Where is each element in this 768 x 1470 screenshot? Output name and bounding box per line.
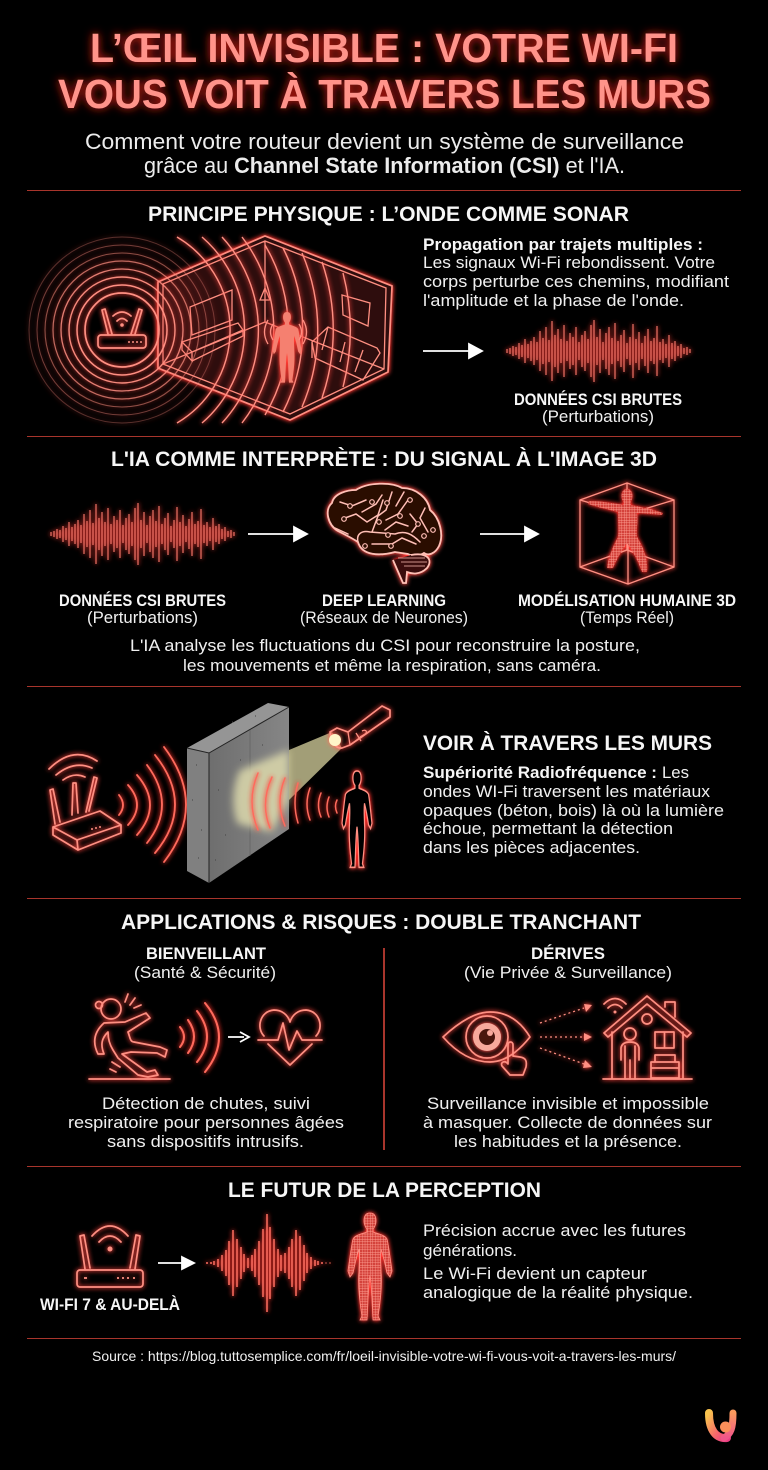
label: raw data: DONNÉES CSI BRUTES	[59, 591, 226, 610]
heading: futur: LE FUTUR DE LA PERCEPTION	[228, 1179, 541, 1202]
arrow	[248, 527, 307, 541]
text: futur: Le Wi-Fi devient un capteur	[423, 1265, 648, 1283]
text: bienveillant: sans dispositifs intrusifs.	[107, 1133, 304, 1151]
label: 3D modelling: (Temps Réel)	[580, 609, 674, 627]
source: Source : https://blog.tuttosemplice.com/fr/loeil-invisible-votre-wi-fi-vous-voit-a-travers-les-murs/	[92, 1348, 676, 1364]
logo	[709, 1413, 733, 1438]
icon: router	[92, 300, 152, 360]
text: IA description: L'IA analyse les fluctuations du CSI pour reconstruire la posture,	[130, 637, 640, 655]
heading: IA: L'IA COMME INTERPRÈTE : DU SIGNAL À L'IMAGE 3D	[111, 448, 657, 471]
text: propagation	[423, 236, 729, 310]
text: dérives	[423, 1095, 713, 1151]
text: propagation: Les signaux Wi-Fi rebondissent. Votre	[423, 254, 715, 272]
text: propagation: Propagation par trajets multiples :	[423, 236, 703, 254]
title	[58, 25, 711, 117]
signal rings	[29, 237, 350, 423]
text: radiofréquence: Supériorité Radiofréquence :	[423, 764, 657, 782]
arrow	[423, 344, 482, 358]
waves	[119, 747, 186, 862]
arrow	[158, 1257, 194, 1269]
text: dérives: Surveillance invisible et impossible	[427, 1095, 709, 1113]
label: deep learning: DEEP LEARNING	[322, 592, 446, 610]
label: bienveillant: (Santé & Sécurité)	[134, 964, 276, 982]
text: radiofréquence: opaques (béton, bois) là où la lumière	[423, 802, 724, 820]
room	[158, 236, 392, 420]
icon: heart	[258, 1010, 322, 1065]
dotted arrows	[540, 1004, 592, 1068]
label: raw CSI: (Perturbations)	[542, 408, 654, 426]
label: dérives	[464, 944, 672, 982]
text: futur: Précision accrue avec les futures	[423, 1222, 686, 1240]
text: futur: générations.	[423, 1242, 517, 1260]
arrow	[228, 1032, 249, 1042]
waves through wall	[252, 773, 337, 830]
label: deep learning	[300, 592, 468, 627]
panel: applications et risques	[68, 911, 713, 1151]
icon: falling person	[89, 994, 170, 1079]
label: deep learning: (Réseaux de Neurones)	[300, 609, 468, 627]
text: bienveillant	[68, 1095, 344, 1151]
label: dérives: DÉRIVES	[531, 944, 605, 963]
text: radiofréquence: dans les pièces adjacentes.	[423, 839, 640, 857]
arrow	[480, 527, 538, 541]
text: IA description: les mouvements et même la respiration, sans caméra.	[183, 657, 601, 675]
text: futur: analogique de la réalité physique.	[423, 1284, 693, 1302]
label: wifi 7: WI-FI 7 & AU-DELÀ	[40, 1295, 180, 1314]
subtitle	[85, 129, 684, 178]
panel: principe physique	[29, 203, 729, 426]
heading: principe physique: PRINCIPE PHYSIQUE : L’ONDE COMME SONAR	[148, 203, 629, 226]
label: 3D modelling	[518, 591, 736, 627]
label: raw CSI	[514, 390, 682, 426]
icon: eye	[443, 1012, 530, 1075]
divider	[383, 948, 385, 1150]
panel: IA interprète	[51, 448, 736, 675]
icon: router	[77, 1226, 143, 1287]
text: bienveillant: respiratoire pour personnes âgées	[68, 1114, 344, 1132]
waveform	[207, 1214, 330, 1312]
label: raw data	[59, 591, 226, 627]
subtitle: grâce au Channel State Information (CSI) et l'IA.	[144, 153, 625, 178]
panel: voir à travers les murs	[49, 703, 724, 883]
icon: 3D human in cube	[580, 483, 674, 584]
text: radiofréquence: échoue, permettant la détection	[423, 820, 673, 838]
title: VOUS VOIT À TRAVERS LES MURS	[58, 71, 711, 117]
label: bienveillant: BIENVEILLANT	[146, 945, 266, 963]
waveform: CSI	[51, 503, 234, 565]
column: bienveillant	[68, 945, 344, 1151]
light beam	[233, 732, 342, 832]
label: raw data: (Perturbations)	[87, 609, 198, 627]
text: radiofréquence: ondes WI-Fi traversent les matériaux	[423, 783, 711, 801]
text: dérives: les habitudes et la présence.	[454, 1133, 682, 1151]
text: IA description	[130, 637, 640, 675]
illustration: router in room	[29, 236, 392, 423]
icon: person	[264, 312, 306, 383]
label: bienveillant	[134, 945, 276, 982]
text: propagation: l'amplitude et la phase de l'onde.	[423, 292, 684, 310]
subtitle: Comment votre routeur devient un système de surveillance	[85, 129, 684, 154]
text: radiofréquence: Les	[662, 764, 689, 782]
icon: silhouette	[342, 771, 372, 867]
label: 3D modelling: MODÉLISATION HUMAINE 3D	[518, 591, 736, 610]
text: dérives: à masquer. Collecte de données sur	[423, 1114, 713, 1132]
icon: router	[49, 755, 121, 850]
heading: voir à travers: VOIR À TRAVERS LES MURS	[423, 732, 712, 755]
icon: flashlight	[329, 706, 390, 748]
text: radiofréquence	[423, 764, 724, 857]
label: raw CSI: DONNÉES CSI BRUTES	[514, 390, 682, 409]
icon: brain	[328, 484, 441, 583]
waveform: raw CSI	[507, 320, 690, 382]
column: dérives	[423, 944, 713, 1151]
icon: house	[603, 996, 692, 1079]
text: propagation: corps perturbe ces chemins, modifiant	[423, 273, 729, 291]
wall	[187, 703, 289, 883]
panel: futur de la perception	[40, 1179, 693, 1320]
heading: applications: APPLICATIONS & RISQUES : DOUBLE TRANCHANT	[121, 911, 641, 934]
icon: 3D human	[348, 1213, 392, 1320]
text: bienveillant: Détection de chutes, suivi	[102, 1095, 310, 1113]
title: L’ŒIL INVISIBLE : VOTRE WI-FI	[90, 25, 678, 71]
waves	[180, 1003, 219, 1072]
text: futur	[423, 1222, 693, 1302]
label: dérives: (Vie Privée & Surveillance)	[464, 964, 672, 982]
